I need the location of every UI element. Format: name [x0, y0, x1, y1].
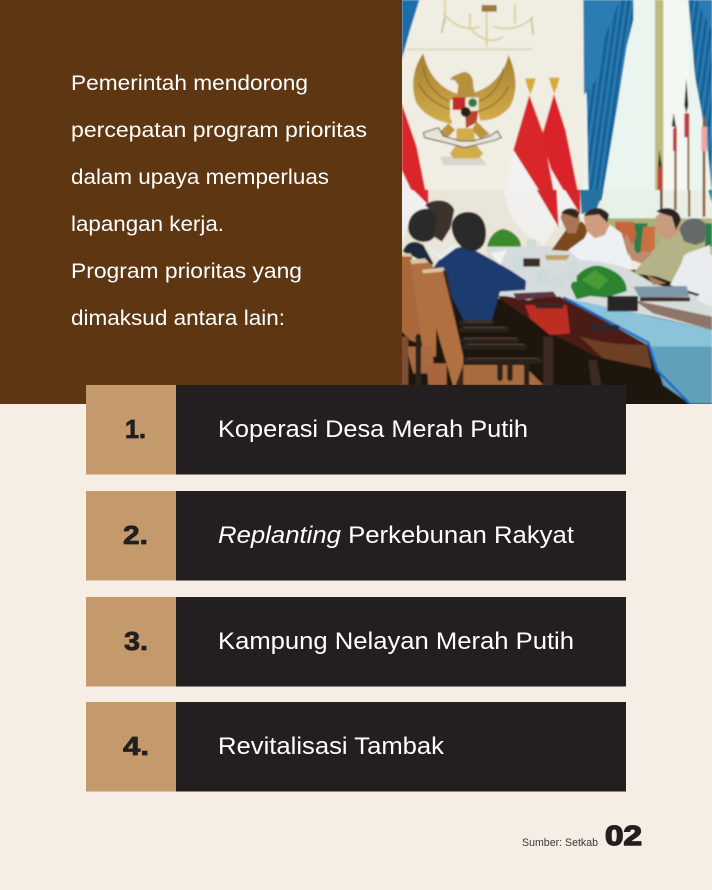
person: left dark suit [403, 242, 433, 266]
intro text: dalam upaya memperluas [71, 166, 329, 189]
window and curtains [584, 0, 712, 200]
dark base below the table line [400, 270, 712, 410]
person: navy suit [433, 246, 526, 320]
list row 4 [86, 702, 626, 792]
brown intro panel [0, 0, 403, 404]
person: khaki shirt [633, 244, 684, 283]
row 2 number: 2. [123, 520, 148, 550]
flags [506, 152, 538, 190]
lower wall [400, 190, 580, 270]
list row 1 [86, 385, 626, 474]
under table legs [543, 337, 602, 387]
person: batik [552, 222, 588, 251]
ceremonial spears [658, 78, 707, 200]
wall shadow under emblem [440, 157, 487, 165]
row 4 number: 4. [123, 731, 149, 761]
table top [497, 296, 652, 368]
row 4 label: Revitalisasi Tambak [218, 733, 445, 760]
chairs [400, 255, 422, 343]
intro text: dimaksud antara lain: [71, 307, 285, 330]
center plant [571, 266, 627, 299]
plant behind [487, 229, 521, 252]
list row 3 [86, 597, 626, 686]
blue table runner [563, 297, 712, 403]
glasses and papers [500, 239, 577, 300]
intro text: lapangan kerja. [71, 213, 224, 236]
row 1 label: Koperasi Desa Merah Putih [218, 416, 528, 443]
intro text [71, 72, 367, 330]
row 2 label: Replanting Perkebunan Rakyat [218, 522, 574, 549]
list row 2 [86, 491, 626, 580]
row 1 number: 1. [125, 414, 146, 444]
person: white shirt [568, 223, 632, 268]
photo: cabinet meeting at the palace [400, 0, 712, 410]
page number: 02 [605, 820, 642, 851]
intro text: percepatan program prioritas [71, 119, 367, 142]
finials [525, 78, 536, 94]
row 3 label: Kampung Nelayan Merah Putih [218, 628, 574, 655]
chandelier [442, 0, 533, 47]
garuda emblem [413, 53, 515, 158]
row 3 number: 3. [124, 626, 148, 656]
person: grey hair white shirt [670, 245, 712, 297]
back table items [487, 247, 712, 330]
intro text: Program prioritas yang [71, 260, 302, 283]
source credit: Sumber: Setkab [522, 837, 598, 849]
intro text: Pemerintah mendorong [71, 72, 308, 95]
